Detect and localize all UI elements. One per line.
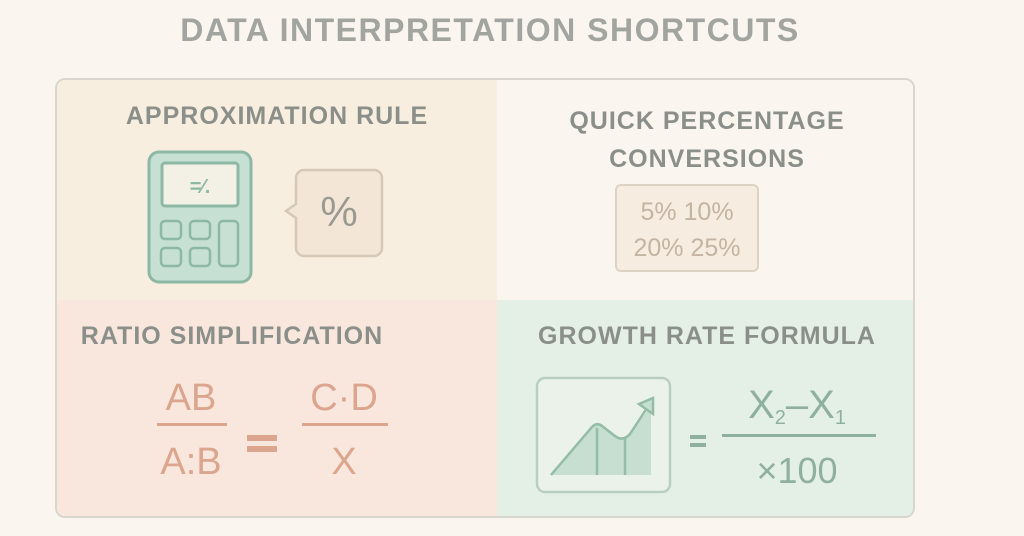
percentage box: 20% 25% [633,234,741,262]
heading: ratio: RATIO SIMPLIFICATION [81,322,383,350]
formula: ratio [157,380,388,483]
formula: growth: 2 [775,407,786,429]
panel: approximation rule [57,80,499,302]
formula: growth: 1 [835,407,846,429]
icon: calculator: =⁄. [190,176,210,198]
panel grid [55,78,915,518]
formula: ratio: A:B [160,441,222,483]
title: DATA INTERPRETATION SHORTCUTS [180,12,800,48]
icon: growth chart [536,376,672,494]
icon: calculator [148,150,384,284]
panel: ratio simplification [57,300,499,520]
heading: quick percentage [569,107,845,173]
formula: ratio: X [331,441,357,483]
heading: quick percentage: CONVERSIONS [609,145,805,173]
heading: quick percentage: QUICK PERCENTAGE [569,107,845,135]
percentage box: 5% 10% [640,198,734,226]
formula: growth: X [748,383,775,427]
heading: growth: GROWTH RATE FORMULA [538,322,876,350]
formula: growth: –X [786,383,835,427]
formula: growth [690,383,876,490]
formula: growth: ×100 [756,450,838,490]
icon: percent bubble [286,170,382,256]
panel: quick percentage conversions [497,80,917,302]
heading: approximation rule: APPROXIMATION RULE [126,102,428,130]
panel: growth rate formula [497,300,917,520]
icon: calculator: % [320,188,358,235]
percentage box [615,184,759,272]
